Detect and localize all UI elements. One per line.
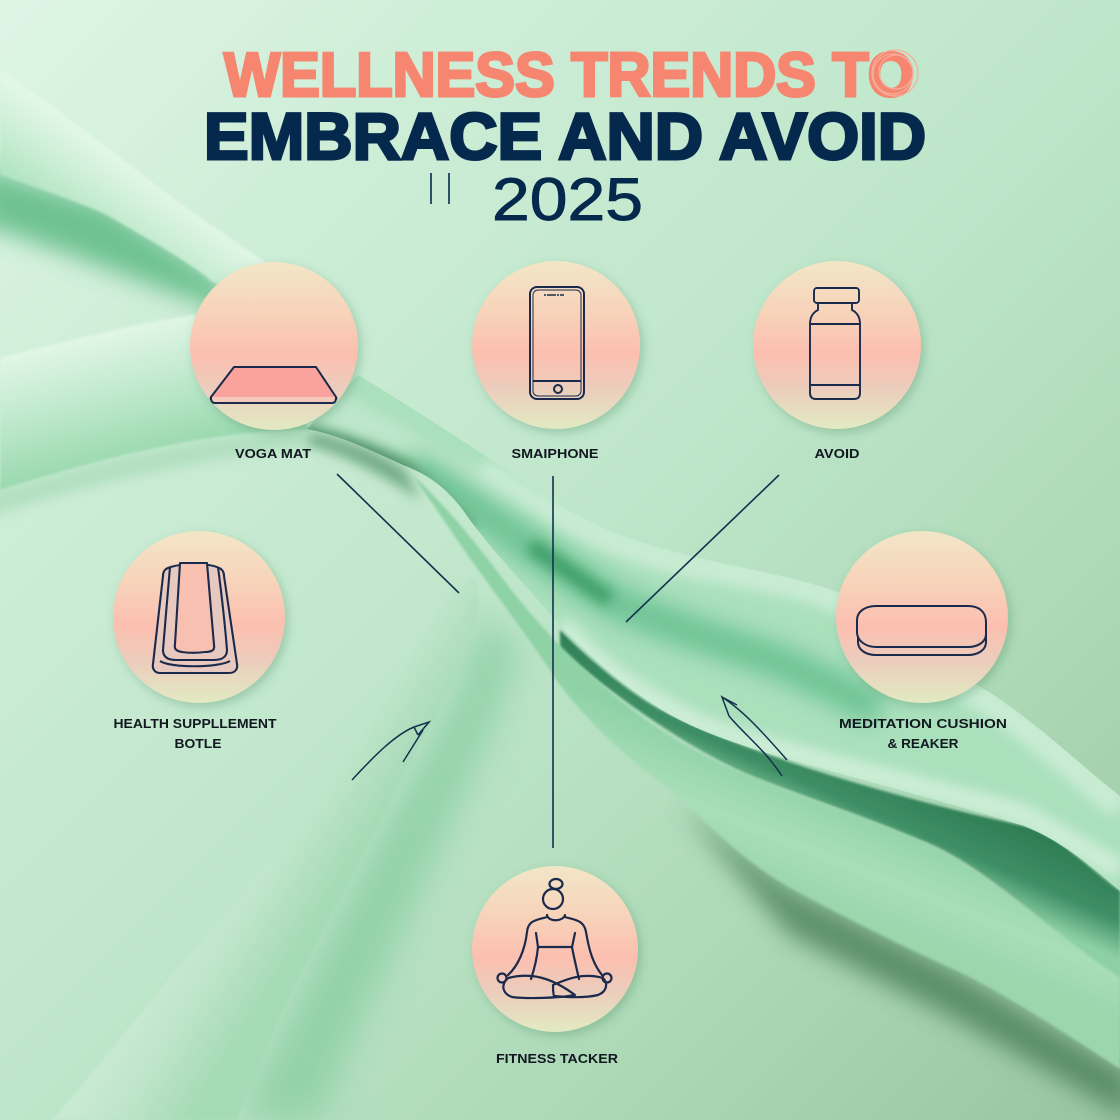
- disc: [472, 866, 638, 1032]
- dark crease between folds: [560, 630, 1120, 985]
- label: [114, 716, 277, 751]
- item: yoga mat: [190, 262, 358, 461]
- shadow beneath left fold: [0, 428, 330, 520]
- arrow: smartphone connector: [552, 476, 554, 848]
- label: FITNESS TACKER: [496, 1051, 619, 1066]
- shadow beneath lower fold: [680, 805, 1120, 1118]
- item: meditation cushion: [836, 531, 1008, 751]
- icon: yoga mat: [211, 367, 336, 403]
- label: HEALTH SUPPLLEMENT: [114, 716, 277, 731]
- year tick marks: [431, 173, 449, 204]
- upper highlight: [480, 470, 1120, 806]
- disc: [190, 262, 358, 430]
- fabric band: left fold: [0, 315, 310, 490]
- lower highlight: [560, 625, 1120, 870]
- left part of drape: [314, 396, 476, 482]
- arrow: avoid connector: [626, 475, 779, 622]
- title line 2: EMBRACE AND AVOID: [204, 99, 926, 173]
- disc: [836, 531, 1008, 703]
- label: [839, 716, 1007, 751]
- disc: [113, 531, 285, 703]
- year: 2025: [492, 166, 643, 233]
- label: AVOID: [814, 447, 860, 461]
- icon: meditating figure: [498, 879, 612, 998]
- crease shading: [407, 465, 880, 710]
- soft shadow under drape at centre: [310, 432, 420, 500]
- fabric band: upper-left drape: [0, 70, 300, 300]
- fabric band: lower fold: [415, 478, 1120, 1069]
- arrow: curved right: [722, 697, 787, 776]
- label: MEDITATION CUSHION: [839, 716, 1007, 731]
- item: avoid bottle: [753, 261, 921, 461]
- title line 1: WELLNESS TRENDS TO: [224, 41, 914, 110]
- icon: cushion: [857, 606, 986, 655]
- fabric band: main drape: [300, 360, 1120, 900]
- icon: stacked bottle outline: [153, 563, 237, 673]
- label: VOGA MAT: [235, 447, 311, 461]
- arrow: yoga mat connector: [337, 474, 459, 593]
- label: & REAKER: [888, 736, 959, 751]
- icon: smartphone: [530, 287, 584, 399]
- title: [204, 41, 926, 173]
- shadow on right of rising band: [240, 610, 520, 1120]
- arrow: curved left: [352, 722, 429, 780]
- icon: bottle: [810, 288, 860, 399]
- item: smartphone: [472, 261, 640, 461]
- item: fitness tracker: [472, 866, 638, 1066]
- disc: [753, 261, 921, 429]
- label: BOTLE: [174, 736, 222, 751]
- shadow beneath upper-left drape: [0, 165, 240, 315]
- label: SMAIPHONE: [512, 447, 598, 461]
- brush circle accent: [872, 50, 918, 96]
- item: health supplement bottle: [113, 531, 285, 751]
- disc: [472, 261, 640, 429]
- fabric band: rising lower left: [52, 578, 479, 1120]
